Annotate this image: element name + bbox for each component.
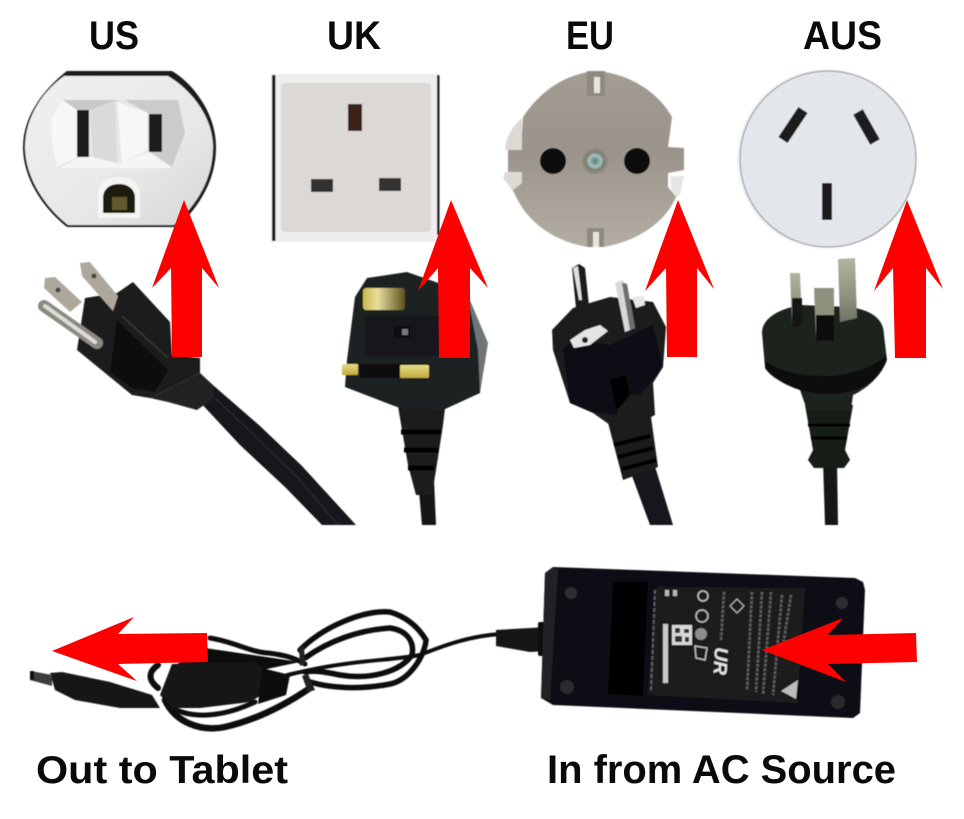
icon: AUS power plug: [762, 258, 887, 525]
icon: US power plug: [44, 262, 356, 525]
caption: Out to Tablet: Out to Tablet: [36, 749, 288, 792]
arrow: UK up: [418, 200, 488, 358]
adapter label markings: [651, 590, 798, 699]
icon: US wall outlet: [23, 71, 216, 227]
arrow: in from AC source: [762, 618, 917, 682]
arrow: EU up: [645, 200, 714, 357]
icon: UK wall socket: [271, 74, 440, 242]
label: AUS: AUS: [803, 14, 882, 58]
icon: DC cable with ferrite core and barrel plug: [30, 612, 500, 728]
label: US: US: [89, 14, 139, 58]
arrow: out to tablet: [52, 617, 208, 681]
adapter label markings: UR: [709, 647, 731, 676]
icon: AUS wall socket: [737, 69, 917, 249]
label: EU: EU: [566, 14, 614, 58]
caption: In from AC Source: In from AC Source: [547, 748, 896, 792]
icon: EU power plug: [552, 264, 673, 525]
arrow: US up: [152, 200, 219, 357]
arrow: AUS up: [874, 200, 943, 358]
icon: UK power plug: [342, 272, 488, 525]
icon: power adapter brick: [496, 567, 865, 718]
label: UK: UK: [327, 14, 381, 58]
icon: EU wall socket: [503, 71, 684, 247]
